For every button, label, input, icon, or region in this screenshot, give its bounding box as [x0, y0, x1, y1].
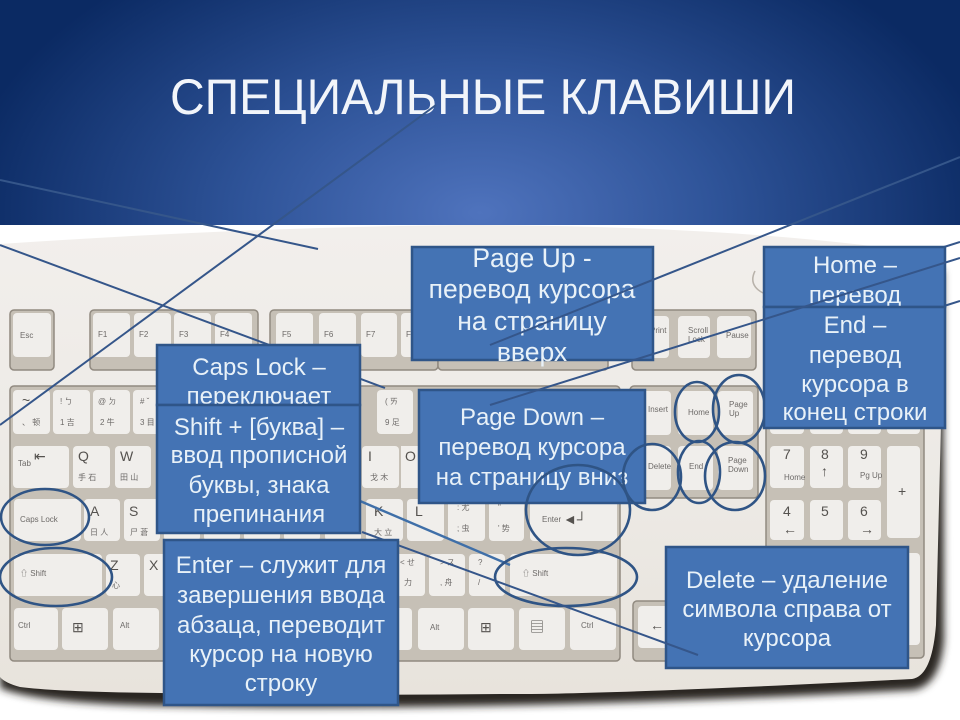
number row: 1 吉 — [60, 418, 75, 427]
qwerty row — [13, 446, 419, 488]
qwerty row: O — [405, 448, 416, 464]
home row: 尸 蒼 — [130, 527, 148, 537]
number row: # ˇ — [140, 397, 150, 406]
title: СПЕЦИАЛЬНЫЕ КЛАВИШИ — [170, 69, 796, 125]
callout: Enter: абзаца, переводит — [177, 612, 385, 639]
qwerty row: Tab — [18, 459, 31, 468]
callout: Page Up: на страницу — [457, 306, 607, 336]
home row: K — [374, 503, 384, 519]
callout: End: перевод — [809, 342, 901, 369]
nav and numpad keys: Insert — [648, 405, 669, 414]
callout: Shift: ввод прописной — [171, 442, 347, 469]
home row: 大 立 — [374, 527, 392, 537]
callout: Page Down: на страницу вниз — [436, 464, 628, 491]
callout line: shift lead — [360, 501, 510, 565]
home row — [14, 499, 617, 541]
nav and numpad keys: Pg Up — [860, 471, 883, 480]
callout: Page Down: Page Down – — [460, 404, 605, 431]
bottom row: ⊞ — [480, 619, 492, 635]
callout: Delete: символа справа от — [682, 596, 892, 623]
callout: Shift: Shift + [буква] – — [174, 414, 345, 441]
qwerty row: 田 山 — [120, 472, 138, 482]
shift row: Z — [110, 557, 119, 573]
callout line: caps lock to key 9 — [0, 245, 385, 388]
callout: Shift: препинания — [193, 501, 325, 528]
function keys: F8 — [406, 330, 416, 339]
ellipse: left shift — [0, 548, 112, 606]
home row: 日 人 — [90, 528, 108, 537]
keyboard — [0, 225, 945, 707]
bottom row: ⊞ — [72, 619, 84, 635]
number row: @ ㄉ — [98, 397, 116, 406]
nav and numpad keys: Delete — [648, 462, 672, 471]
callout: Page Up: Page Up - — [472, 243, 592, 273]
number row: 、 顿 — [22, 417, 40, 427]
ellipse: right shift — [495, 548, 637, 606]
home row: S — [129, 503, 138, 519]
callout: Delete: Delete – удаление — [686, 567, 888, 594]
home row: A — [90, 503, 100, 519]
qwerty row: 手 石 — [78, 472, 96, 482]
ellipse: caps lock — [1, 489, 89, 545]
home row: Caps Lock — [20, 515, 59, 524]
callout: Enter: строку — [245, 670, 317, 697]
shift row: ⇧ Shift — [20, 568, 47, 578]
home row: ◄┘ — [563, 511, 587, 527]
function keys: F5 — [282, 330, 292, 339]
shift row: , 舟 — [440, 577, 452, 587]
function keys: Esc — [20, 331, 33, 340]
function keys: F7 — [366, 330, 376, 339]
home row: ; 虫 — [457, 523, 469, 533]
function keys: F2 — [139, 330, 149, 339]
ellipse: enter — [526, 465, 630, 555]
callout: End: End – — [824, 312, 887, 339]
callout line: page down — [490, 258, 960, 405]
shift row: 力 — [404, 577, 412, 587]
callout: Caps Lock: переключает — [187, 383, 331, 410]
callout line: title to keyboard — [0, 180, 318, 249]
function keys: Lock — [688, 335, 706, 344]
qwerty row: ⇤ — [34, 448, 46, 464]
qwerty row: I — [368, 448, 372, 464]
key wells — [10, 310, 924, 661]
callout: Enter: завершения ввода — [177, 582, 386, 609]
shift row: < せ — [400, 558, 415, 567]
nav and numpad keys: End — [689, 462, 703, 471]
function keys: Print — [650, 326, 667, 335]
callout: Delete — [666, 547, 908, 668]
home row: Enter — [542, 515, 561, 524]
callout: Caps Lock — [157, 345, 360, 410]
ellipse: page up — [713, 375, 765, 443]
shift row: 心 — [112, 581, 120, 590]
callout line: right margin stubs — [944, 242, 960, 306]
nav and numpad keys: 7 — [783, 446, 791, 462]
bottom row: Alt — [430, 623, 440, 632]
nav and numpad keys: 4 — [783, 503, 791, 519]
callout: Shift: буквы, знака — [188, 472, 330, 499]
callout: Page Down: перевод курсора — [438, 434, 626, 461]
callout line: delete — [362, 532, 698, 655]
callout: Enter: курсор на новую — [189, 641, 373, 668]
shift row: ⇧ Shift — [522, 568, 549, 578]
home row: " — [498, 503, 501, 512]
nav and numpad keys: + — [898, 483, 906, 499]
shift row: > ス — [440, 558, 455, 567]
ellipse: home — [675, 382, 719, 442]
bottom row: Ctrl — [581, 621, 594, 630]
bottom row: Alt — [120, 621, 130, 630]
function keys: F6 — [324, 330, 334, 339]
header band — [0, 0, 960, 225]
nav and numpad keys: ↑ — [821, 463, 828, 479]
number row: ~ — [22, 392, 30, 408]
callout: Delete: курсора — [743, 625, 832, 652]
bottom row: Ctrl — [18, 621, 31, 630]
bottom row: ▤ — [530, 619, 544, 635]
function keys: Pause — [726, 331, 749, 340]
callout: Page Down — [419, 390, 645, 503]
nav and numpad keys: ← — [783, 521, 797, 537]
number row: ! ㄅ — [60, 397, 72, 406]
callout: Enter: Enter – служит для — [176, 552, 386, 579]
number row — [13, 390, 413, 434]
number row: ( ㄞ — [385, 397, 398, 406]
home row: ' 势 — [498, 523, 510, 533]
function keys: F4 — [220, 330, 230, 339]
nav and numpad keys: Home — [688, 408, 710, 417]
qwerty row: W — [120, 448, 134, 464]
callout: Home: Home – — [813, 252, 898, 279]
ellipse: page down — [705, 442, 765, 510]
shift row — [14, 554, 617, 596]
callout: Page Up: перевод курсора — [429, 274, 636, 304]
nav and numpad keys: Down — [728, 465, 748, 474]
ellipse: delete — [623, 444, 681, 510]
callout: End: курсора в — [801, 371, 909, 398]
number row: 9 足 — [385, 418, 400, 427]
shift row: X — [149, 557, 159, 573]
nav and numpad keys: Up — [729, 409, 740, 418]
callout: Enter — [164, 540, 398, 705]
function keys — [13, 313, 751, 358]
nav and numpad keys — [635, 391, 920, 648]
nav and numpad keys: Home — [784, 473, 806, 482]
shift row: / — [478, 578, 481, 587]
callout: Shift — [157, 405, 360, 533]
ellipse: end — [678, 441, 720, 503]
shift row: ? — [478, 558, 483, 567]
callout: End: конец строки — [783, 399, 927, 426]
callout: Home: перевод — [809, 282, 901, 309]
callout: Page Up: вверх — [497, 337, 567, 367]
callout: End — [764, 307, 945, 428]
callout: Page Up — [412, 243, 653, 367]
function keys: F3 — [179, 330, 189, 339]
number row: 3 目 — [140, 418, 155, 427]
home row: L — [415, 503, 423, 519]
function keys: Scroll — [688, 326, 708, 335]
number row: 2 牛 — [100, 417, 115, 427]
function keys: F1 — [98, 330, 108, 339]
nav and numpad keys: Page — [728, 456, 747, 465]
bottom row — [14, 608, 616, 650]
icon: logo arc — [753, 271, 763, 293]
nav and numpad keys: Page — [729, 400, 748, 409]
nav and numpad keys: 6 — [860, 503, 868, 519]
nav and numpad keys: ← — [650, 617, 664, 633]
callout line: page up — [490, 157, 960, 345]
nav and numpad keys: 5 — [821, 503, 829, 519]
callout: Caps Lock: Caps Lock – — [192, 354, 326, 381]
nav and numpad keys: 8 — [821, 446, 829, 462]
callout: Home — [764, 247, 945, 309]
qwerty row: 戈 木 — [370, 472, 388, 482]
nav and numpad keys: 9 — [860, 446, 868, 462]
home row: : 尤 — [457, 502, 469, 512]
qwerty row: Q — [78, 448, 89, 464]
nav and numpad keys: → — [860, 521, 874, 537]
callout line: caps lock to upper right — [0, 105, 436, 425]
